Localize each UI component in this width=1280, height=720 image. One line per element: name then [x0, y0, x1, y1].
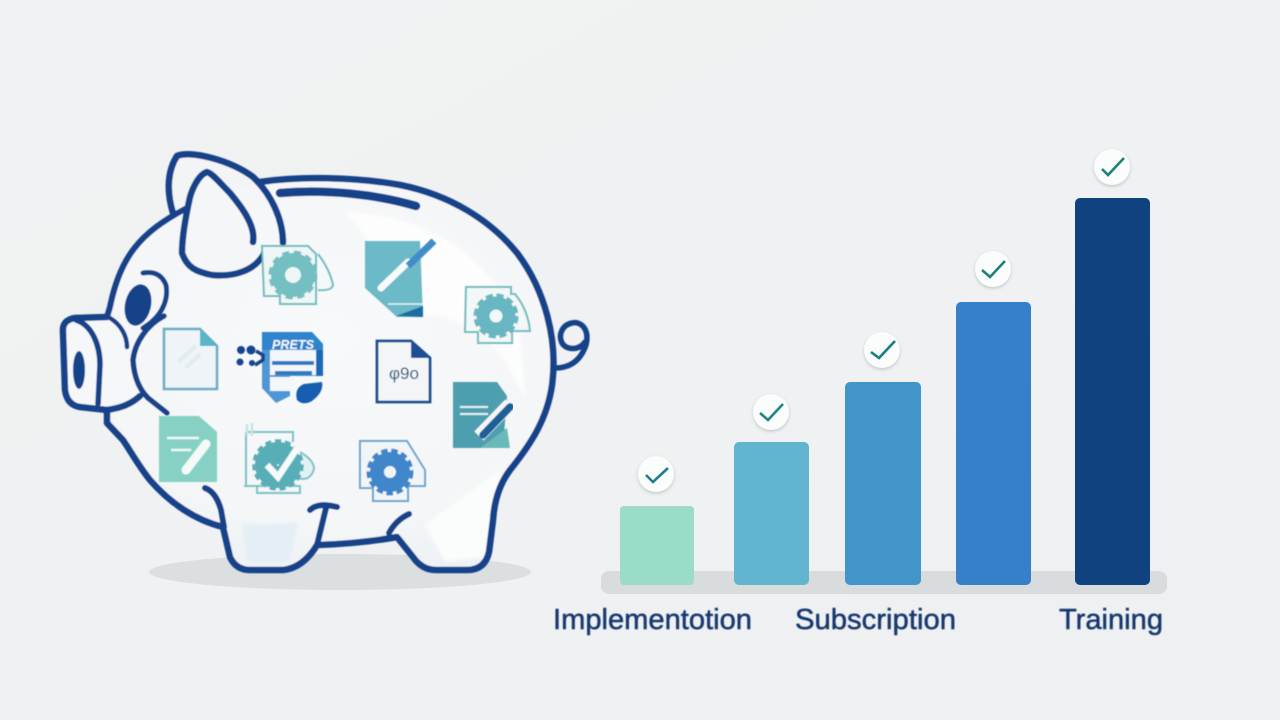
ground shadow under piggy bank [149, 554, 531, 590]
bar 1 [620, 506, 694, 585]
belly creases [205, 488, 409, 545]
chart baseline shelf [601, 571, 1167, 594]
eye [121, 272, 167, 328]
icon: document with pen [365, 241, 434, 317]
check badge 3 [864, 332, 900, 368]
bar 2 [734, 442, 809, 585]
check badge 1 [638, 456, 674, 492]
cheek curve [133, 316, 167, 413]
head line [107, 209, 185, 317]
bar 5 [1075, 198, 1150, 585]
connector dots [236, 346, 263, 366]
icon: blank document [164, 329, 217, 389]
label: Subscription: Subscription [795, 604, 956, 636]
foot shading [242, 470, 500, 563]
inner ear [182, 172, 265, 275]
icon: blue gear document [360, 441, 425, 501]
body outline [107, 178, 553, 570]
label: Training: Training [1059, 604, 1163, 636]
icon: check gear document [244, 423, 314, 493]
tail [555, 323, 587, 368]
check badge 5 [1094, 149, 1130, 185]
ear fill [169, 154, 283, 253]
icon: gear document top [262, 246, 333, 304]
check badge 2 [753, 394, 789, 430]
icon: gear document right [465, 287, 530, 343]
header text: PRETS [272, 337, 314, 352]
label: Implementotion: Implementotion [553, 604, 752, 636]
glass highlight [345, 212, 525, 400]
icon: dark outline document [377, 341, 430, 402]
check badge 4 [975, 251, 1011, 287]
icon: central document with header [236, 332, 323, 403]
bar chart [601, 149, 1167, 594]
outer ear [169, 154, 283, 243]
bar 4 [956, 302, 1031, 585]
icon: dark outline document: φ9o [389, 364, 419, 383]
coin slot [280, 192, 416, 206]
piggy body fill [63, 178, 553, 570]
bar 3 [845, 382, 921, 585]
piggy bank [63, 154, 587, 570]
icon: mint document [159, 416, 217, 482]
icon: teal document with pen [453, 382, 510, 448]
snout [63, 317, 140, 410]
